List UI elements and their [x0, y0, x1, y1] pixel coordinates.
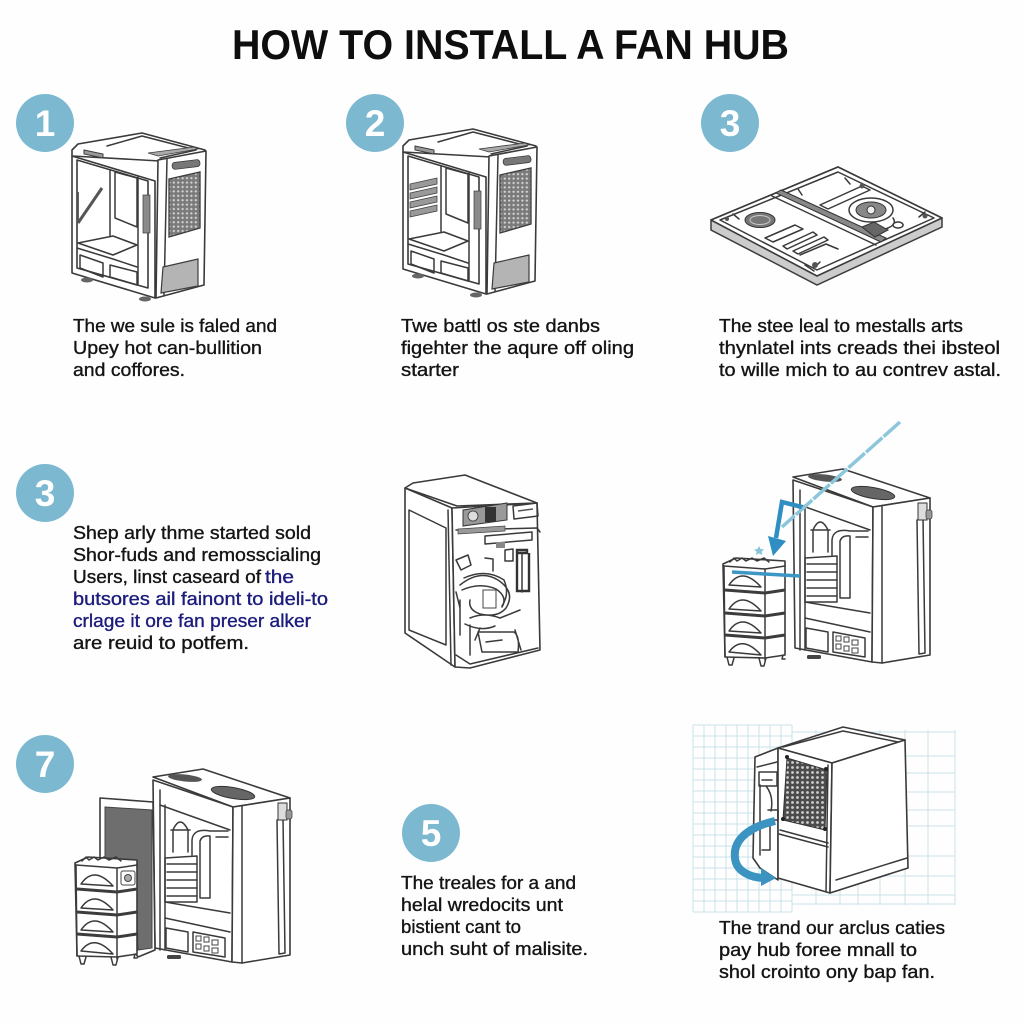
- background grid: [693, 725, 955, 912]
- panel: step 4 text: [16, 464, 328, 653]
- badge: second number 3: 3: [35, 473, 55, 514]
- arrow: dashed diagonal guide line: [782, 422, 900, 527]
- badge: number 7: [16, 735, 74, 793]
- step 5 text: [401, 873, 588, 959]
- arrow: curved blue arrow: [735, 821, 776, 886]
- step 4 text: Shep arly thme started sold: [73, 523, 311, 543]
- step 1 text: The we sule is faled and: [73, 316, 277, 336]
- badge: number 2: 2: [365, 103, 385, 144]
- illustration: open unit with cables: [405, 475, 540, 668]
- illustration: case with shelves: [403, 129, 537, 298]
- step 3 text: to wille mich to au contrev astal.: [719, 360, 1001, 380]
- illustration: open PC case: [72, 133, 206, 302]
- step 4 text: are reuid to potfem.: [73, 633, 249, 653]
- arrow: horizontal blue line: [732, 572, 800, 576]
- step 2 text: figehter the aqure off oling: [401, 338, 634, 358]
- step 8 text: [719, 918, 945, 982]
- step 5 text: helal wredocits unt: [401, 895, 563, 915]
- illustration: fan hub board: [711, 167, 942, 285]
- badge: number 2: [346, 94, 404, 152]
- step 4 text: the: [265, 567, 294, 587]
- step 3 text: [719, 316, 1001, 380]
- title: HOW TO INSTALL A FAN HUB: [232, 21, 789, 68]
- arrow: blue down arrow: [768, 502, 802, 556]
- illustration: tower with fan stack and arrows: [723, 422, 932, 666]
- step 4 text: crlage it ore fan preser alker: [73, 611, 311, 631]
- step 2 text: [401, 316, 634, 380]
- panel: step 5: [401, 804, 588, 959]
- badge: second number 3: [16, 464, 74, 522]
- icon: small star mark: [754, 546, 764, 555]
- step 3 text: thynlatel ints creads thei ibsteol: [719, 338, 1000, 358]
- badge: number 3: [701, 94, 759, 152]
- step 4 text: [73, 523, 328, 653]
- illustration: closed case with arrow: [735, 727, 908, 893]
- step 4 text: Users, linst caseard of: [73, 567, 262, 587]
- step 2 text: starter: [401, 360, 459, 380]
- step 8 text: pay hub foree mnall to: [719, 940, 917, 960]
- badge: number 3: 3: [720, 103, 740, 144]
- panel: step 7: [16, 735, 292, 965]
- step 4 text: butsores ail fainont to ideli-to: [73, 589, 328, 609]
- step 1 text: and coffores.: [73, 360, 185, 380]
- step 1 text: [73, 316, 277, 380]
- step 5 text: unch suht of malisite.: [401, 939, 588, 959]
- badge: number 7: 7: [35, 744, 55, 785]
- step 8 text: shol crointo ony bap fan.: [719, 962, 935, 982]
- panel: step 3: [701, 94, 1001, 380]
- step 5 text: bistient cant to: [401, 917, 521, 937]
- step 5 text: The treales for a and: [401, 873, 576, 893]
- badge: number 1: [16, 94, 74, 152]
- badge: number 5: 5: [421, 813, 441, 854]
- step 2 text: Twe battl os ste danbs: [401, 316, 600, 336]
- illustration: tower with open door and fan stack: [75, 769, 292, 965]
- step 4 text: Shor-fuds and remosscialing: [73, 545, 321, 565]
- step 3 text: The stee leal to mestalls arts: [719, 316, 963, 336]
- step 1 text: Upey hot can-bullition: [73, 338, 262, 358]
- panel: step 8: [693, 725, 955, 982]
- panel: step 2: [346, 94, 634, 380]
- panel: step 1: [16, 94, 277, 380]
- badge: number 5: [402, 804, 460, 862]
- step 8 text: The trand our arclus caties: [719, 918, 945, 938]
- badge: number 1: 1: [35, 103, 55, 144]
